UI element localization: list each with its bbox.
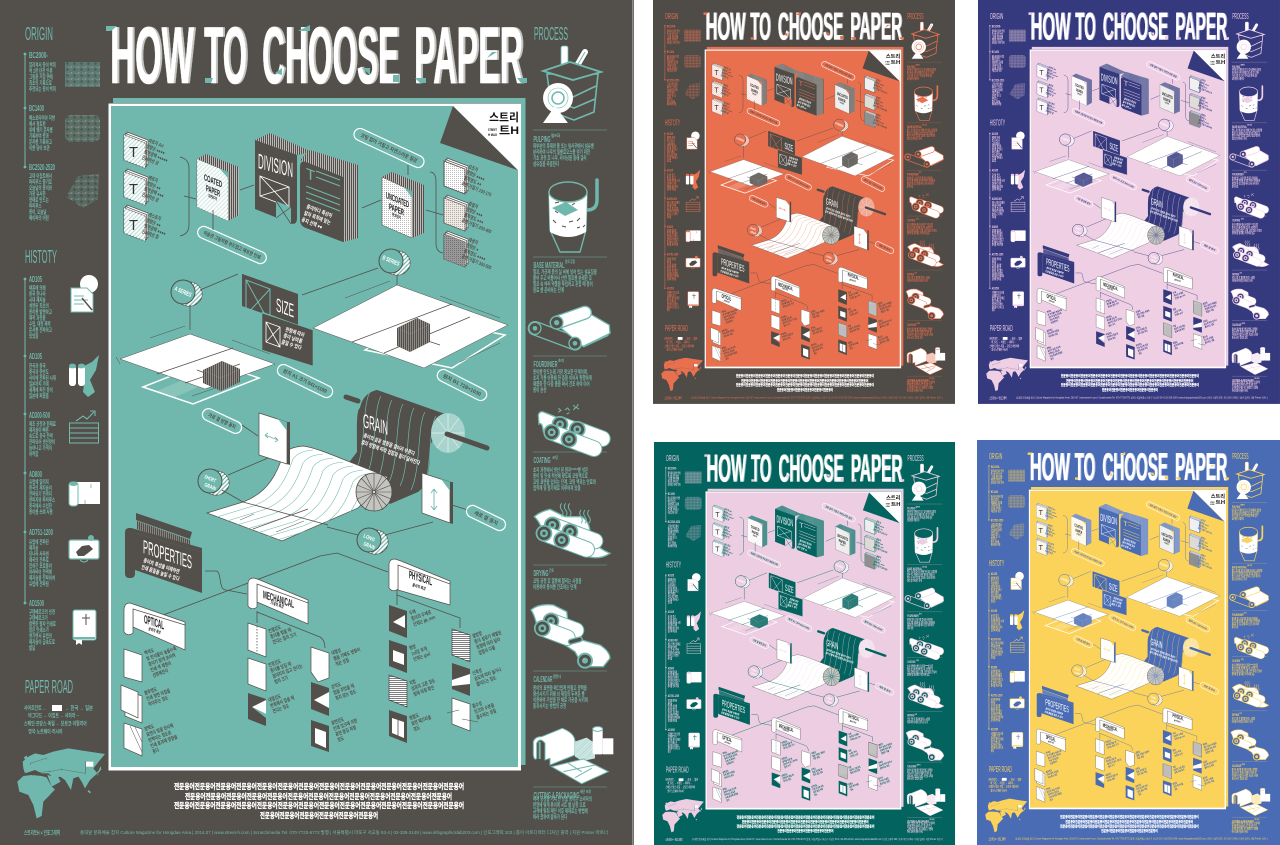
variant poster: navy and pink [978,0,1280,404]
variant poster: orange [653,0,955,404]
variant poster: dark teal and pink [654,442,955,845]
main poster: grey and teal [0,0,634,845]
variant poster: blue and yellow [977,440,1280,845]
poster edge line [632,0,634,845]
